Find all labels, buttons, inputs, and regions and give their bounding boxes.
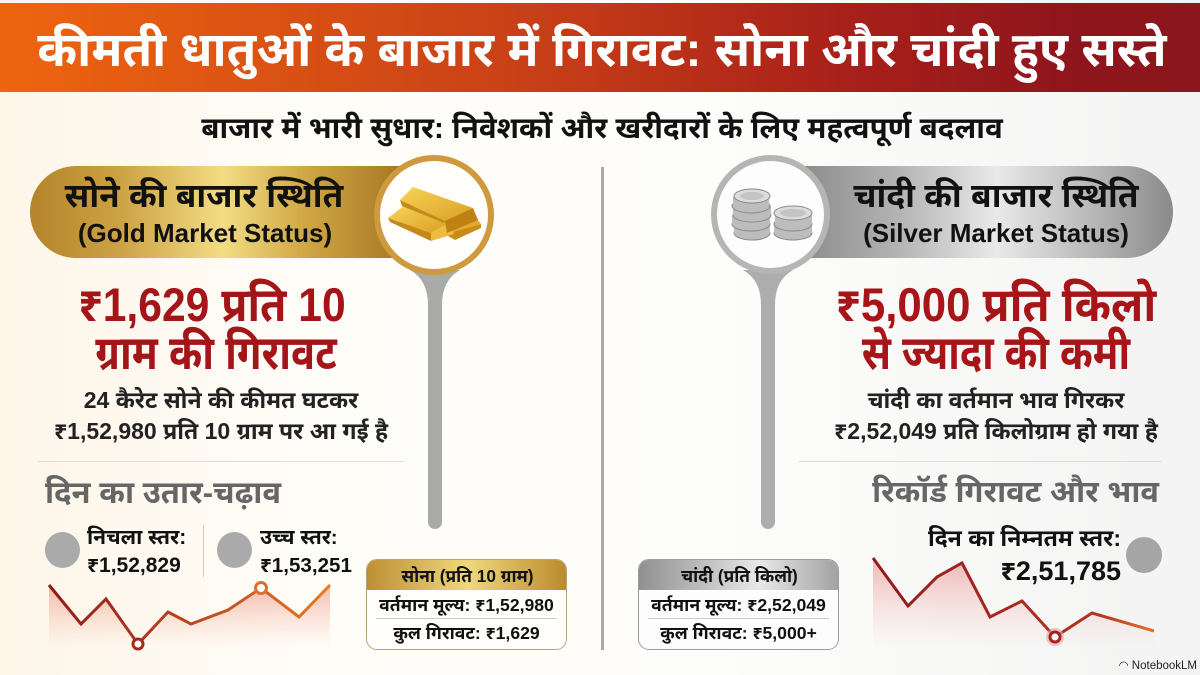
- high value: ₹1,53,251: [260, 554, 352, 577]
- panel: gold: [30, 155, 567, 650]
- gold pin stem: [410, 270, 460, 529]
- stat: high: [217, 526, 352, 577]
- high value: [260, 526, 352, 577]
- card current price: वर्तमान मूल्य: ₹1,52,980: [379, 595, 554, 615]
- subtitle: बाजार में भारी सुधार: निवेशकों और खरीदारों के लिए महत्वपूर्ण बदलाव: [201, 112, 1003, 145]
- silver description: [834, 387, 1158, 444]
- silver heading pill: [805, 166, 1173, 258]
- stat: day low: [928, 525, 1162, 586]
- silver main figure: ₹5,000 प्रति किलो: [836, 278, 1156, 331]
- day low text: दिन का निम्नतम स्तर:: [928, 525, 1121, 551]
- silver description: ₹2,52,049 प्रति किलोग्राम हो गया है: [834, 418, 1158, 444]
- silver main figure: से ज्यादा की कमी: [862, 326, 1130, 379]
- low value: निचला स्तर:: [87, 526, 186, 549]
- gold description: [54, 386, 388, 444]
- card total drop: कुल गिरावट: ₹1,629: [393, 623, 540, 643]
- gold main figure: ₹1,629 प्रति 10: [78, 278, 346, 331]
- card header: सोना (प्रति 10 ग्राम): [401, 566, 534, 586]
- day low marker: [1126, 537, 1162, 573]
- gold main figure: [78, 278, 346, 379]
- card header: चांदी (प्रति किलो): [681, 566, 798, 586]
- low value: ₹1,52,829: [87, 554, 181, 577]
- card current price: वर्तमान मूल्य: ₹2,52,049: [651, 595, 826, 615]
- center divider: [601, 167, 604, 650]
- stat: low: [45, 526, 186, 577]
- icon: silver coins: [711, 155, 830, 274]
- card header: [367, 560, 568, 590]
- silver section heading: रिकॉर्ड गिरावट और भाव: [872, 474, 1159, 509]
- silver rule: [799, 461, 1161, 462]
- low value: [87, 526, 186, 577]
- gold description: ₹1,52,980 प्रति 10 ग्राम पर आ गई है: [54, 418, 388, 444]
- day low text: [928, 525, 1121, 586]
- card header: [639, 560, 840, 590]
- silver heading English: (Silver Market Status): [863, 218, 1129, 248]
- icon: gold bars: [374, 155, 494, 275]
- gold heading Hindi: सोने की बाजार स्थिति: [65, 178, 343, 215]
- gold description: 24 कैरेट सोने की कीमत घटकर: [84, 387, 358, 413]
- gold main figure: ग्राम की गिरावट: [95, 326, 337, 379]
- silver description: चांदी का वर्तमान भाव गिरकर: [868, 387, 1124, 413]
- title: कीमती धातुओं के बाजार में गिरावट: सोना और चांदी हुए सस्ते: [37, 24, 1167, 77]
- gold heading English: (Gold Market Status): [78, 218, 332, 248]
- silver main figure: [836, 278, 1157, 379]
- gold line chart: [48, 581, 331, 650]
- header banner: [0, 3, 1200, 92]
- silver pin stem: [743, 270, 793, 529]
- watermark: ◠ NotebookLM: [1119, 660, 1197, 672]
- day low text: ₹2,51,785: [1000, 556, 1121, 586]
- gold rule: [38, 461, 404, 462]
- gold heading pill: [30, 166, 400, 258]
- card total drop: कुल गिरावट: ₹5,000+: [660, 623, 817, 643]
- silver heading Hindi: चांदी की बाजार स्थिति: [853, 178, 1139, 215]
- low marker: [45, 532, 80, 568]
- silver line chart: [872, 557, 1154, 646]
- panel: silver: [638, 155, 1173, 650]
- gold section heading: दिन का उतार-चढ़ाव: [45, 475, 281, 510]
- silver summary card: [638, 559, 839, 650]
- high marker: [217, 532, 252, 568]
- gold summary card: [366, 559, 567, 650]
- high value: उच्च स्तर:: [260, 526, 338, 549]
